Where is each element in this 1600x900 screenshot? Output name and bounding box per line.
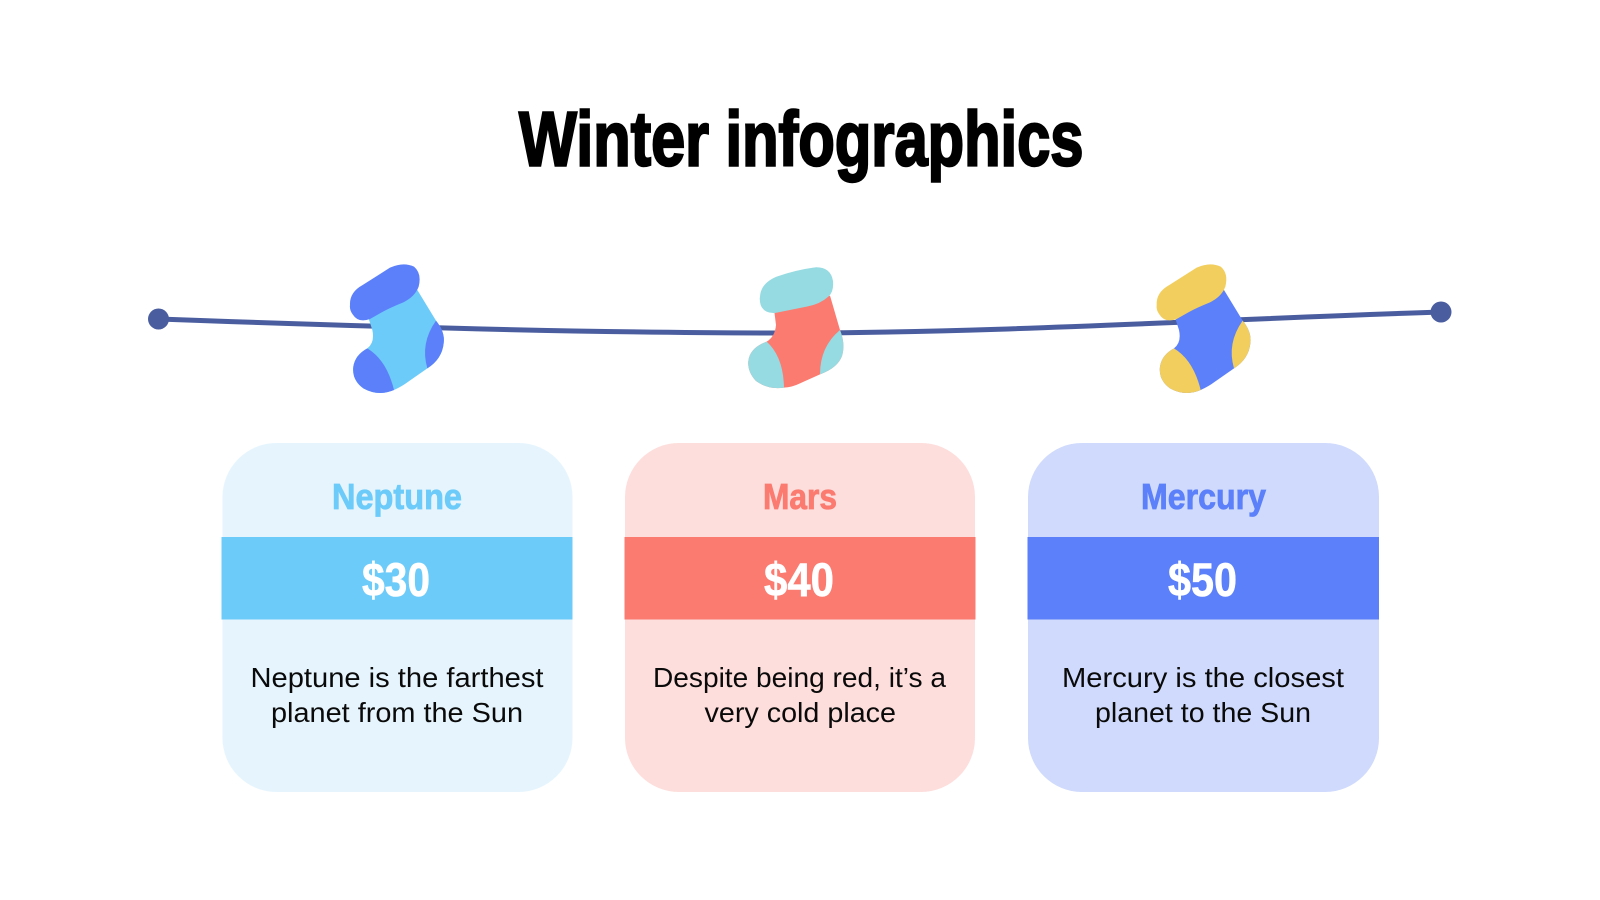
icon: blue sock [350,264,444,393]
title: Winter [519,96,709,182]
description: Mars: Despite being red, it’s a [653,662,946,693]
description: Mars [653,662,946,728]
description: Mercury: Mercury is the closest [1062,662,1344,693]
description: Mars: very cold place [704,697,896,728]
heading: Mercury: Mercury [1141,476,1266,517]
icon: red sock [748,267,843,388]
price band: $50: $50 [1168,553,1237,606]
description: Neptune: Neptune is the farthest [250,662,544,693]
description: Mercury [1062,662,1344,728]
heading: Mars: Mars [763,476,837,517]
price band: $40 [624,537,976,620]
icon: yellow sock [1157,264,1251,393]
title: infographics [726,96,1084,182]
title [519,96,1084,182]
description: Neptune: planet from the Sun [271,697,523,728]
price band: $50 [1028,537,1379,620]
description: Mercury: planet to the Sun [1095,697,1311,728]
panel: Mars [624,443,976,792]
price band: $30 [222,537,572,620]
price band: $40: $40 [764,553,834,606]
description: Neptune [250,662,544,728]
garland string with end dots [148,302,1452,333]
heading: Neptune: Neptune [332,476,462,517]
panel: Mercury [1028,443,1379,792]
panel: Neptune [222,443,572,792]
price band: $30: $30 [362,553,430,606]
